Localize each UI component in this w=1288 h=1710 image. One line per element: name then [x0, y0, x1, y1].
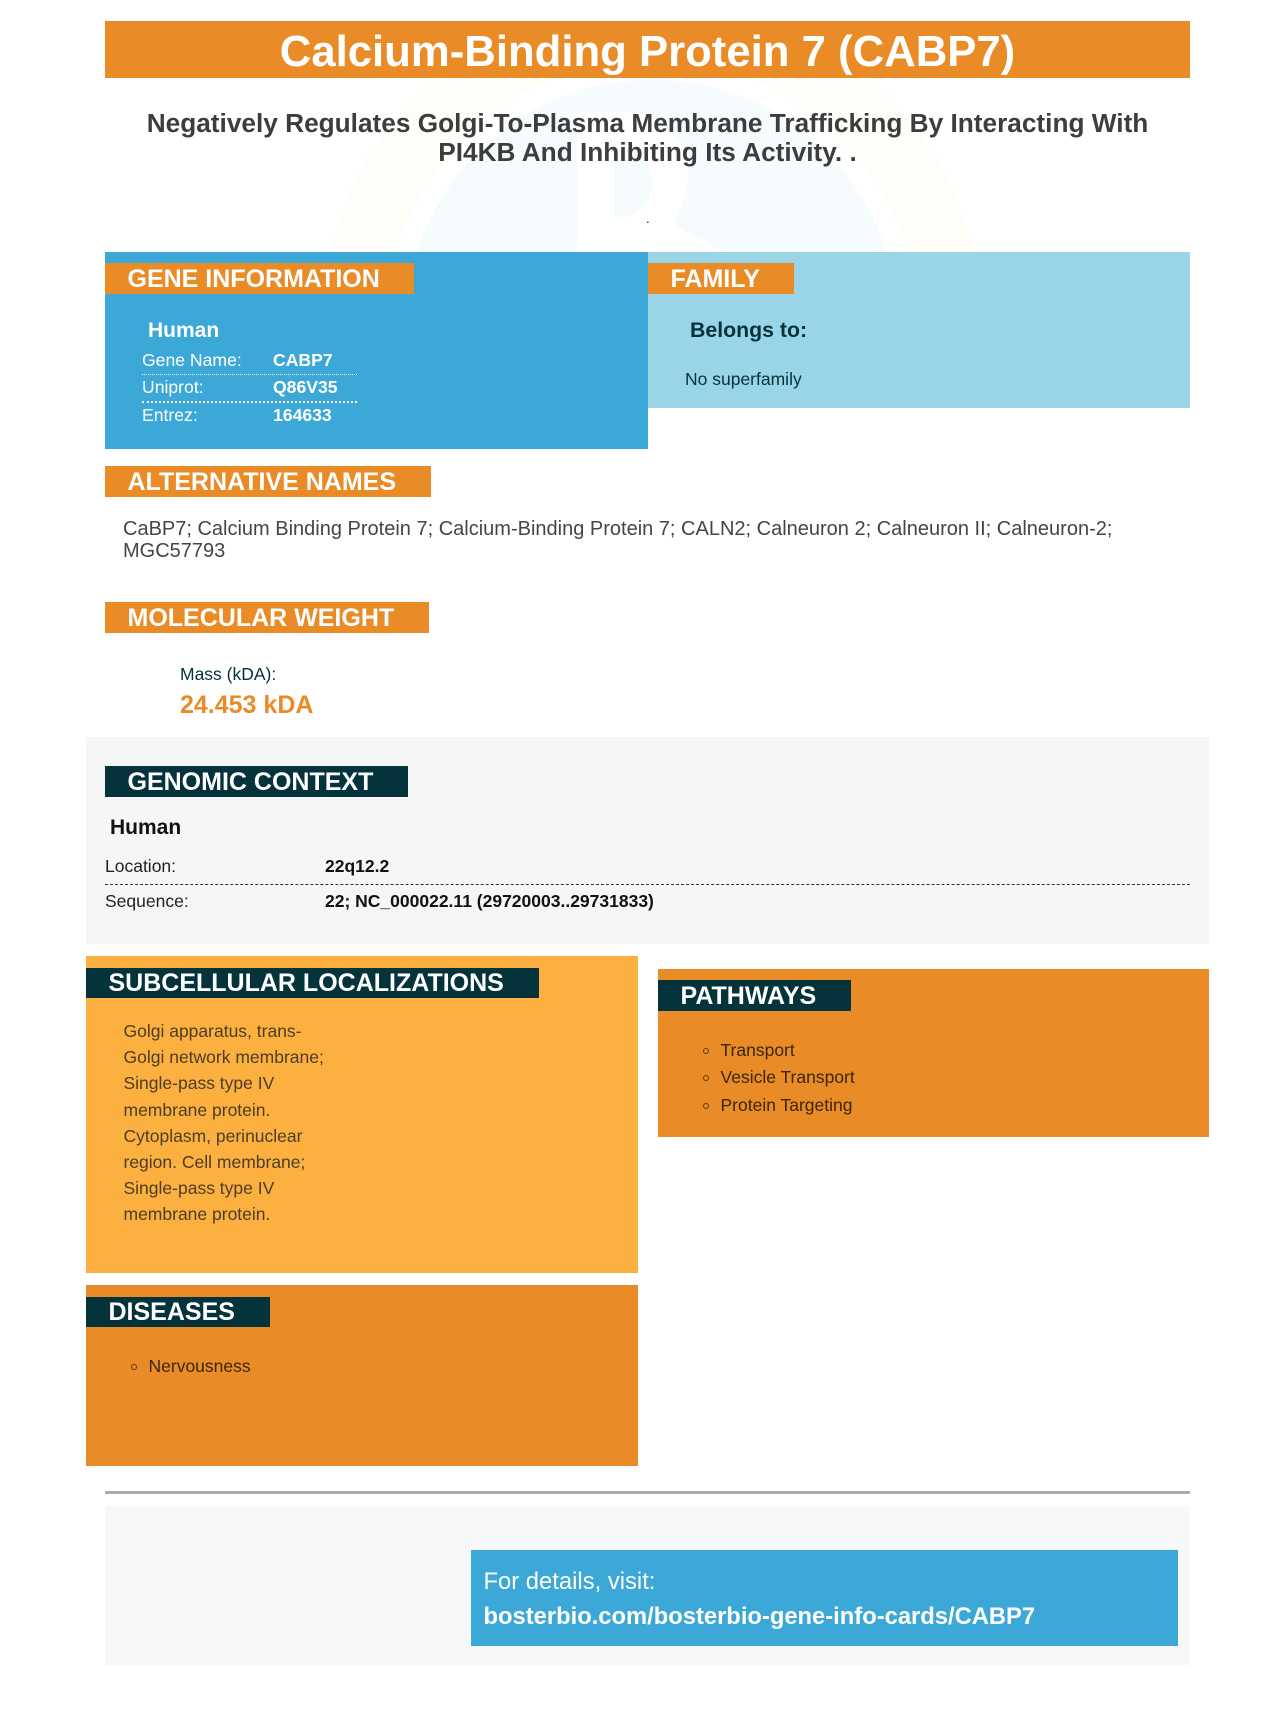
- panel: genomic context: [86, 737, 1209, 944]
- small dot text: .: [646, 211, 650, 226]
- pathway list: Vesicle Transport: [720, 1067, 855, 1087]
- species label: Human: [110, 816, 181, 839]
- entrez row: [142, 405, 332, 425]
- disease list: Nervousness: [148, 1356, 251, 1376]
- entrez row: 164633: [273, 405, 332, 425]
- localization text: membrane protein.: [124, 1204, 270, 1224]
- details url: bosterbio.com/bosterbio-gene-info-cards/CABP7: [484, 1603, 1035, 1630]
- heading: gene information: GENE INFORMATION: [128, 265, 380, 293]
- subtitle: Negatively Regulates Golgi-To-Plasma Membrane Trafficking By Interacting With: [147, 108, 1148, 138]
- subtitle: [147, 108, 1148, 167]
- alternative names text: MGC57793: [123, 540, 225, 562]
- entrez row: Entrez:: [142, 405, 198, 425]
- title: [105, 21, 1190, 78]
- heading: subcellular localizations: SUBCELLULAR LOCALIZATIONS: [108, 969, 504, 997]
- family value: No superfamily: [685, 369, 802, 389]
- heading: pathways: PATHWAYS: [680, 982, 816, 1010]
- heading: family: [648, 263, 794, 294]
- localization text: Single-pass type IV: [124, 1178, 274, 1198]
- callout: details link: [471, 1550, 1178, 1646]
- location row: Location:: [105, 856, 176, 876]
- gene name row: CABP7: [273, 350, 333, 370]
- gene name row: Gene Name:: [142, 350, 242, 370]
- location row: [105, 855, 1190, 885]
- heading: genomic context: GENOMIC CONTEXT: [128, 768, 373, 796]
- watermark logo: [418, 80, 886, 252]
- mass value: 24.453 kDA: [180, 691, 313, 719]
- footer rule: [105, 1491, 1190, 1494]
- location row: 22q12.2: [325, 856, 389, 876]
- panel: subcellular localizations: [86, 956, 638, 1273]
- uniprot row: Q86V35: [273, 377, 338, 397]
- heading: diseases: [86, 1297, 270, 1327]
- details label: For details, visit:: [484, 1568, 655, 1595]
- localization text: Golgi apparatus, trans-: [124, 1021, 302, 1041]
- localization text: region. Cell membrane;: [124, 1152, 305, 1172]
- heading: molecular weight: MOLECULAR WEIGHT: [128, 604, 394, 632]
- localization text: membrane protein.: [124, 1100, 270, 1120]
- sequence row: 22; NC_000022.11 (29720003..29731833): [325, 891, 654, 911]
- mass label: Mass (kDA):: [180, 664, 276, 684]
- heading: diseases: DISEASES: [108, 1298, 235, 1326]
- panel: footer: [105, 1506, 1190, 1665]
- heading: alternative names: ALTERNATIVE NAMES: [128, 468, 396, 496]
- heading: family: FAMILY: [670, 265, 760, 293]
- localization text: Single-pass type IV: [124, 1073, 274, 1093]
- alternative names text: CaBP7; Calcium Binding Protein 7; Calcium-Binding Protein 7; CALN2; Calneuron 2; Calneuron II; Calneuron-2;: [123, 518, 1112, 540]
- species label: Human: [148, 319, 219, 342]
- belongs to label: Belongs to:: [690, 318, 807, 342]
- pathway list: Transport: [720, 1040, 795, 1060]
- uniprot row: [142, 377, 357, 403]
- panel: gene information: [105, 252, 648, 449]
- title: Calcium-Binding Protein 7 (CABP7): [280, 27, 1015, 76]
- sequence row: [105, 891, 654, 911]
- localization text: Golgi network membrane;: [124, 1047, 324, 1067]
- localization text: Cytoplasm, perinuclear: [124, 1126, 302, 1146]
- sequence row: Sequence:: [105, 891, 189, 911]
- subtitle: PI4KB And Inhibiting Its Activity. .: [438, 137, 857, 167]
- pathway list: [703, 1040, 855, 1115]
- gene name row: [142, 350, 357, 375]
- localization text: [124, 1021, 324, 1224]
- panel: diseases: [86, 1285, 638, 1466]
- alternative names text: [123, 518, 1112, 562]
- panel: pathways: [658, 969, 1209, 1137]
- pathway list: Protein Targeting: [720, 1095, 852, 1115]
- uniprot row: Uniprot:: [142, 377, 204, 397]
- panel: family: [648, 252, 1190, 408]
- heading: pathways: [658, 980, 851, 1011]
